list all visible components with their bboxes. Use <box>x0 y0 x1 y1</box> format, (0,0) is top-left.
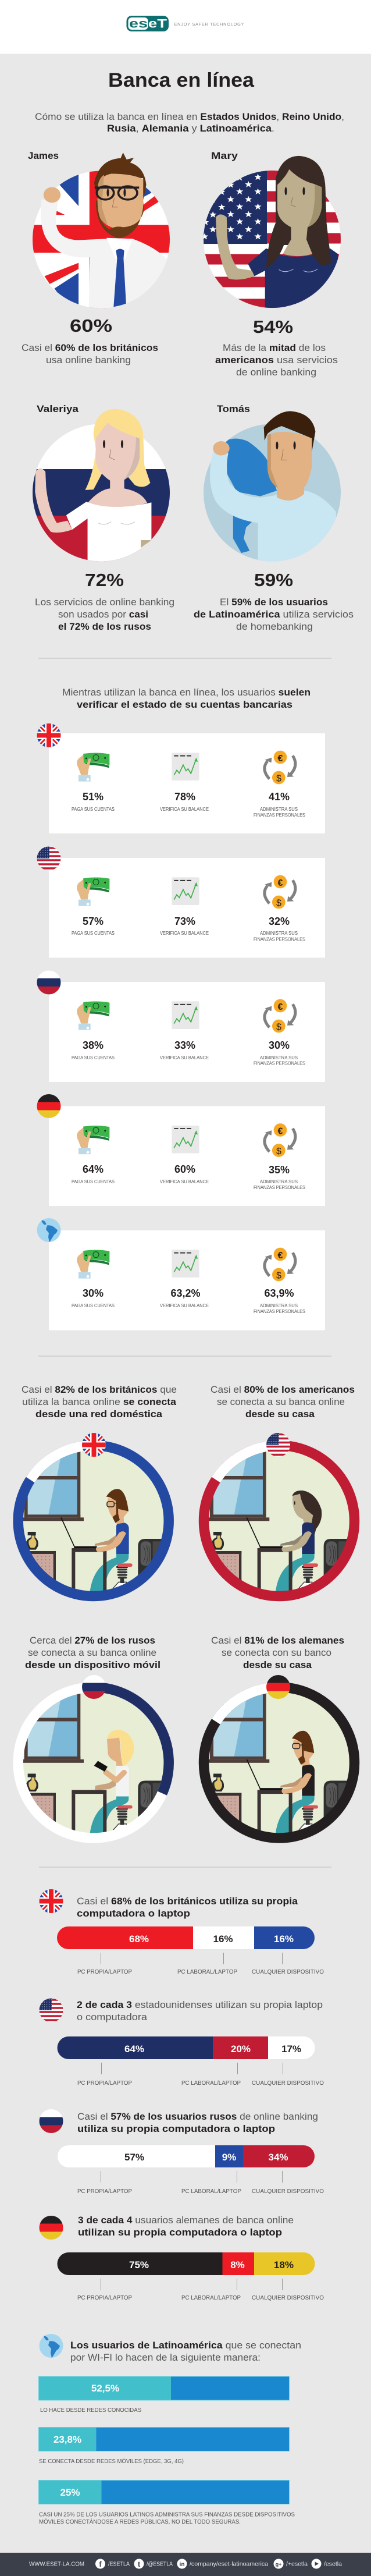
icon: US flag <box>266 1433 291 1457</box>
stat: checks balance: 33% <box>174 1039 195 1051</box>
bar labels: CUALQUIER DISPOSITIVO <box>252 2188 324 2195</box>
panel: Latin America activities <box>37 1218 325 1330</box>
icon: Latin America globe <box>39 2334 63 2358</box>
bar chart: 64% <box>124 2043 144 2055</box>
name: Valeriya: Valeriya <box>37 403 79 414</box>
icon: German flag <box>266 1675 291 1699</box>
character: Valeriya <box>35 409 151 563</box>
icon: coins: € <box>278 878 283 888</box>
stat: pays bills: PAGA SUS CUENTAS <box>72 806 115 812</box>
character: James <box>41 152 168 312</box>
icon: chart <box>172 753 199 780</box>
bar: 25%: 25% <box>60 2487 80 2498</box>
bar chart: 17% <box>281 2043 301 2055</box>
heading: computadora o laptop <box>77 1908 190 1919</box>
panel: Latin America Wi-Fi <box>38 2334 301 2525</box>
label: CASI UN 25% DE LOS USUARIOS LATINOS ADMINISTRA SUS FINANZAS DESDE DISPOSITIVOS <box>39 2512 295 2518</box>
icon: UK flag disc <box>33 171 170 308</box>
stat: manages finances: ADMINISTRA SUS <box>260 1179 298 1184</box>
icon: Latin America globe <box>37 1218 61 1242</box>
icon: coins: $ <box>276 899 281 908</box>
label: LO HACE DESDE REDES CONOCIDAS <box>40 2407 141 2414</box>
stat: checks balance: 78% <box>174 791 195 803</box>
bar chart: 16% <box>274 1933 294 1945</box>
stat: 54%: 54% <box>253 317 293 337</box>
social: google plus: /+esetla <box>286 2561 308 2568</box>
bar labels: PC PROPIA/LAPTOP <box>77 2295 132 2301</box>
stat: pays bills <box>72 1163 115 1184</box>
bar labels <box>77 1969 324 1975</box>
icon: UK flag <box>39 1889 63 1914</box>
icon: South America disc <box>201 422 346 565</box>
bar labels: CUALQUIER DISPOSITIVO <box>252 1969 324 1975</box>
stat: checks balance <box>160 1039 209 1060</box>
social: linkedin: /company/eset-latinoamerica <box>190 2561 268 2568</box>
bar chart <box>57 1926 315 1949</box>
icon: coins <box>265 1248 295 1281</box>
icon: chart <box>172 1126 199 1153</box>
stat: manages finances <box>254 1164 305 1190</box>
heading: por WI-FI lo hacen de la siguiente manera: <box>70 2352 261 2363</box>
panel: Germany activities <box>37 1094 325 1206</box>
heading <box>70 2340 301 2363</box>
icon: money <box>77 753 109 782</box>
text: UK connection: utiliza la banca online se conecta <box>22 1396 177 1407</box>
stat: pays bills <box>72 1287 115 1308</box>
panel: James <box>22 150 174 366</box>
bar chart <box>57 2252 315 2275</box>
stat: manages finances: 35% <box>269 1164 290 1176</box>
bar: 23,8% <box>38 2427 290 2451</box>
bar chart: 9% <box>222 2152 236 2163</box>
panel: Russia device use <box>39 2109 324 2195</box>
stat: manages finances <box>254 1039 305 1066</box>
stat: checks balance: VERIFICA SU BALANCE <box>160 1303 209 1308</box>
stat: checks balance: VERIFICA SU BALANCE <box>160 930 209 936</box>
stat: manages finances <box>254 791 305 818</box>
stat: checks balance: 63,2% <box>170 1287 201 1299</box>
panel: US connection <box>204 1384 356 1596</box>
heading: utiliza su propia computadora o laptop <box>77 2123 275 2134</box>
stat: checks balance: 60% <box>174 1163 195 1175</box>
bar labels <box>77 2295 324 2301</box>
icon: coins: € <box>278 1002 283 1012</box>
bar labels: CUALQUIER DISPOSITIVO <box>252 2080 324 2087</box>
bar: 52,5% <box>38 2376 290 2400</box>
icon: coins: $ <box>276 1147 281 1156</box>
bar chart <box>58 2145 315 2167</box>
footer: WWW.ESET-LA.COM <box>29 2561 84 2568</box>
bar labels: PC LABORAL/LAPTOP <box>181 2188 241 2195</box>
caption: el 72% de los rusos <box>58 621 151 632</box>
bar: 23,8%: 23,8% <box>53 2434 81 2445</box>
bar labels <box>77 2080 324 2087</box>
label: MÓVILES CONECTÁNDOSE A REDES PÚBLICAS, NO DEL TODO SEGURAS. <box>39 2518 241 2525</box>
icon: coins: $ <box>276 1022 281 1032</box>
logo: ESET: eT <box>148 17 167 30</box>
caption: Casi el 60% de los británicos <box>22 342 158 353</box>
header band <box>0 0 371 54</box>
bar labels: PC PROPIA/LAPTOP <box>77 2188 132 2195</box>
text: US connection: desde su casa <box>245 1408 315 1420</box>
heading <box>78 2215 294 2238</box>
icon: coins: € <box>278 1127 283 1136</box>
stat: manages finances: 32% <box>269 916 290 927</box>
bar chart: 68% <box>129 1933 149 1945</box>
illustration: Valeriya with phone <box>23 1693 164 1833</box>
social: twitter: t <box>138 2560 141 2568</box>
stat: pays bills <box>72 791 115 812</box>
ring: 81% <box>204 1687 355 1838</box>
intro text: Cómo se utiliza la banca en línea en Estados Unidos, Reino Unido, <box>35 111 344 122</box>
icon: Russian flag <box>37 970 61 995</box>
icon: chart <box>172 1001 199 1029</box>
panel: Mary <box>201 150 346 378</box>
text: US connection: se conecta a su banca online <box>217 1396 345 1407</box>
panel: Russia connection <box>18 1635 170 1839</box>
tagline: ENJOY SAFER TECHNOLOGY <box>174 22 244 27</box>
stat: checks balance <box>160 1163 209 1184</box>
panel: Tomás <box>194 403 354 632</box>
text: Germany connection <box>211 1635 344 1670</box>
caption <box>215 342 338 378</box>
bar labels: PC PROPIA/LAPTOP <box>77 1969 132 1975</box>
stat: manages finances: FINANZAS PERSONALES <box>254 1184 305 1190</box>
icon: coins: € <box>278 754 283 764</box>
text: Germany connection: se conecta con su banco <box>222 1647 331 1658</box>
icon: coins: € <box>278 1251 283 1261</box>
bar labels <box>77 2188 324 2195</box>
ring: 82% <box>18 1446 169 1596</box>
stat: manages finances: ADMINISTRA SUS <box>260 1303 298 1308</box>
icon: coins: $ <box>276 1271 281 1280</box>
icon: money <box>77 1126 109 1154</box>
panel: US activities <box>37 846 325 958</box>
text: US connection <box>211 1384 355 1420</box>
character: Mary <box>216 156 338 312</box>
social: linkedin: in <box>180 2561 184 2568</box>
social: facebook <box>95 2559 130 2569</box>
icon: coins <box>265 751 295 784</box>
stat: manages finances: 63,9% <box>264 1287 294 1299</box>
section intro <box>62 687 311 710</box>
stat: pays bills <box>72 916 115 936</box>
caption: usa online banking <box>46 354 131 366</box>
caption: El 59% de los usuarios <box>220 597 328 608</box>
caption <box>194 597 354 632</box>
bar chart <box>57 2036 315 2059</box>
footer <box>0 2553 371 2576</box>
caption: de homebanking <box>236 621 313 632</box>
stat: manages finances <box>254 1287 305 1314</box>
logo: ESET <box>127 16 169 31</box>
icon: money <box>77 1001 109 1030</box>
icon: coins <box>265 1123 295 1157</box>
stat: pays bills: 64% <box>83 1163 104 1175</box>
text: UK connection: Casi el 82% de los británicos que <box>22 1384 177 1395</box>
stat: checks balance: VERIFICA SU BALANCE <box>160 806 209 812</box>
bar labels: CUALQUIER DISPOSITIVO <box>252 2295 324 2301</box>
panel: Russia activities <box>37 970 325 1082</box>
stat: 72%: 72% <box>85 570 124 590</box>
bar chart: 20% <box>231 2043 251 2055</box>
icon: chart <box>172 877 199 905</box>
stat: 60%: 60% <box>70 315 112 336</box>
name: James: James <box>28 150 59 161</box>
panel: Valeriya <box>29 403 174 632</box>
social: twitter: /@ESETLA <box>147 2561 173 2568</box>
icon: US flag disc <box>201 169 346 311</box>
icon: German flag <box>39 2215 63 2240</box>
stat: manages finances: FINANZAS PERSONALES <box>254 812 305 818</box>
caption <box>22 342 158 366</box>
section intro: Mientras utilizan la banca en línea, los usuarios suelen <box>62 687 311 698</box>
label <box>39 2512 295 2525</box>
icon: German flag <box>37 1094 61 1119</box>
heading: 3 de cada 4 usuarios alemanes de banca online <box>78 2215 294 2226</box>
name: Mary: Mary <box>211 150 238 161</box>
social: youtube: /esetla <box>324 2561 342 2568</box>
illustration: man at laptop <box>209 1693 349 1833</box>
heading <box>77 1999 323 2023</box>
stat: checks balance: VERIFICA SU BALANCE <box>160 1179 209 1184</box>
social: google plus: g+ <box>276 2561 281 2567</box>
bar labels: PC LABORAL/LAPTOP <box>181 2295 241 2301</box>
stat: 59%: 59% <box>254 570 293 590</box>
stat: manages finances <box>254 916 305 942</box>
caption <box>35 597 174 632</box>
panel: Germany device use <box>39 2215 324 2301</box>
name: Tomás: Tomás <box>217 403 250 414</box>
ring: 27% <box>18 1687 169 1838</box>
social: twitter <box>134 2559 173 2569</box>
stat: pays bills: 51% <box>83 791 104 803</box>
icon: UK flag <box>81 1433 106 1457</box>
icon: chart <box>172 1250 199 1278</box>
stat: pays bills: PAGA SUS CUENTAS <box>72 930 115 936</box>
caption: son usados por casi <box>58 609 148 620</box>
stat: manages finances: FINANZAS PERSONALES <box>254 936 305 942</box>
text: Germany connection: Casi el 81% de los alemanes <box>211 1635 344 1646</box>
heading <box>77 2111 318 2134</box>
text: Germany connection: desde su casa <box>243 1659 312 1670</box>
text: US connection: Casi el 80% de los americanos <box>211 1384 355 1395</box>
stat: pays bills: PAGA SUS CUENTAS <box>72 1055 115 1060</box>
stat: pays bills: PAGA SUS CUENTAS <box>72 1179 115 1184</box>
heading: utilizan su propia computadora o laptop <box>78 2227 282 2238</box>
caption: Más de la mitad de los <box>223 342 326 353</box>
stat: pays bills <box>72 1039 115 1060</box>
bar: 25% <box>38 2481 290 2504</box>
icon: Russian flag disc <box>29 422 174 562</box>
title: Banca en línea <box>108 69 255 91</box>
icon: coins <box>265 875 295 909</box>
social: facebook: f <box>99 2560 102 2568</box>
illustration: James at laptop <box>23 1452 164 1591</box>
stat: manages finances: ADMINISTRA SUS <box>260 930 298 936</box>
text: Russia connection <box>25 1635 160 1670</box>
heading: 2 de cada 3 estadounidenses utilizan su propia laptop <box>77 1999 323 2010</box>
caption: de Latinoamérica utiliza servicios <box>194 609 354 620</box>
intro text: Rusia, Alemania y Latinoamérica . <box>107 123 274 134</box>
heading: Casi el 68% de los británicos utiliza su propia <box>77 1896 298 1907</box>
panel: US device use <box>39 1998 324 2087</box>
icon: Russian flag <box>39 2109 63 2134</box>
stat: checks balance: VERIFICA SU BALANCE <box>160 1055 209 1060</box>
stat: manages finances: FINANZAS PERSONALES <box>254 1060 305 1066</box>
text: UK connection <box>22 1384 177 1420</box>
stat: checks balance: 73% <box>174 916 195 927</box>
bar chart: 75% <box>129 2259 149 2270</box>
label: SE CONECTA DESDE REDES MÓVILES (EDGE, 3G, 4G) <box>39 2457 184 2465</box>
panel: UK connection <box>18 1384 177 1596</box>
bar chart: 16% <box>213 1933 233 1945</box>
bar: 52,5%: 52,5% <box>91 2383 119 2394</box>
panel: UK device use <box>39 1889 324 1975</box>
intro text <box>35 111 344 134</box>
text: Russia connection: Cerca del 27% de los rusos <box>30 1635 155 1646</box>
icon: US flag <box>39 1998 63 2023</box>
character: Tomás <box>210 411 336 563</box>
stat: pays bills: PAGA SUS CUENTAS <box>72 1303 115 1308</box>
text: Russia connection: desde un dispositivo móvil <box>25 1659 160 1670</box>
heading: Los usuarios de Latinoamérica que se conectan <box>70 2340 301 2351</box>
icon: coins: $ <box>276 774 281 783</box>
stat: manages finances: FINANZAS PERSONALES <box>254 1308 305 1314</box>
social: youtube <box>312 2559 342 2569</box>
heading: o computadora <box>77 2011 148 2023</box>
icon: money <box>77 1250 109 1279</box>
text: UK connection: desde una red doméstica <box>35 1408 163 1420</box>
bar chart: 8% <box>230 2259 245 2270</box>
social: google plus <box>273 2559 308 2569</box>
icon: money <box>77 877 109 906</box>
stat: checks balance <box>160 916 209 936</box>
icon: coins <box>265 999 295 1032</box>
social: facebook: /ESETLA <box>108 2561 130 2568</box>
icon: US flag <box>37 846 61 871</box>
section intro: verificar el estado de su cuentas bancarias <box>77 699 292 710</box>
ring: 80% <box>204 1446 355 1596</box>
stat: pays bills: 57% <box>83 916 104 927</box>
bar labels: PC LABORAL/LAPTOP <box>177 1969 237 1975</box>
stat: manages finances: 30% <box>269 1039 290 1051</box>
panel: UK activities <box>37 723 325 833</box>
social: linkedin <box>177 2559 268 2569</box>
icon: Russian flag <box>81 1675 106 1699</box>
stat: checks balance <box>160 1287 209 1308</box>
bar chart: 57% <box>124 2152 144 2163</box>
bar chart: 34% <box>268 2152 288 2163</box>
bar labels: PC PROPIA/LAPTOP <box>77 2080 132 2087</box>
heading <box>77 1896 298 1919</box>
bar labels: PC LABORAL/LAPTOP <box>181 2080 241 2087</box>
panel: Germany connection <box>204 1635 356 1839</box>
text: Russia connection: se conecta a su banca online <box>28 1647 156 1658</box>
caption: americanos usa servicios <box>215 354 338 366</box>
bar chart: 18% <box>274 2259 294 2270</box>
stat: pays bills: 30% <box>83 1287 104 1299</box>
caption: de online banking <box>236 367 316 378</box>
caption: Los servicios de online banking <box>35 597 174 608</box>
icon: UK flag <box>37 723 61 747</box>
illustration: Mary at laptop <box>209 1452 349 1591</box>
heading: Casi el 57% de los usuarios rusos de online banking <box>77 2111 318 2122</box>
stat: checks balance <box>160 791 209 812</box>
stat: manages finances: ADMINISTRA SUS <box>260 806 298 812</box>
stat: pays bills: 38% <box>83 1039 104 1051</box>
stat: manages finances: 41% <box>269 791 290 803</box>
logo: ESET: es <box>129 17 148 30</box>
stat: manages finances: ADMINISTRA SUS <box>260 1055 298 1060</box>
